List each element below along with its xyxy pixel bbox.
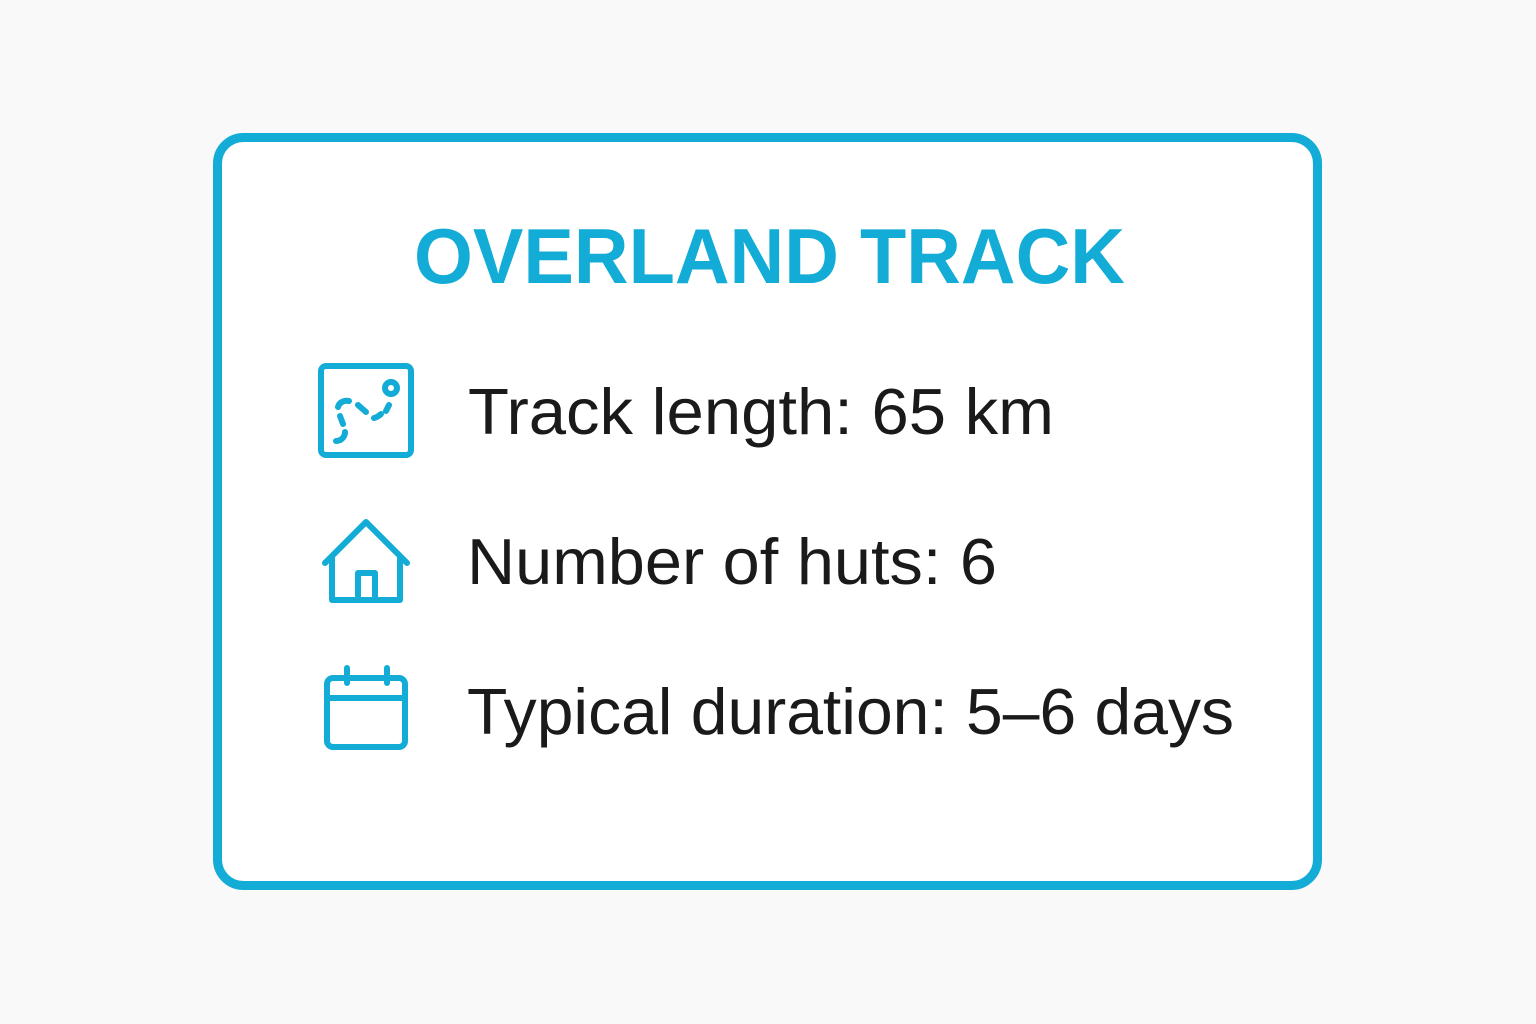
icon: house [325,522,407,600]
text: typical duration: Typical duration: 5–6 days [467,675,1234,748]
panel: overland track card [218,138,1318,886]
title: OVERLAND TRACK [414,212,1125,300]
text: track length: Track length: 65 km [468,375,1054,448]
icon: route map [321,366,411,455]
icon: calendar [327,668,405,747]
text: number of huts: Number of huts: 6 [467,525,997,598]
